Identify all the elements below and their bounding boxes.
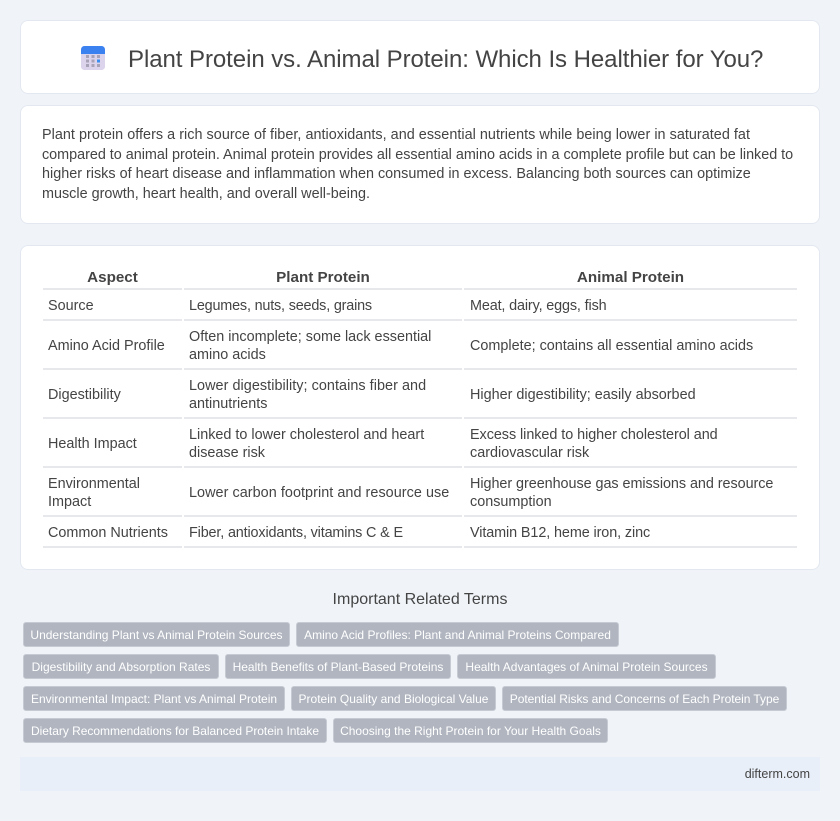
row: digestibility: Lower digestibility; contains fiber and xyxy=(189,378,426,394)
tags: related terms: Choosing the Right Protein for Your Health Goals xyxy=(340,724,601,738)
row: common nutrients xyxy=(48,525,650,541)
row: digestibility: antinutrients xyxy=(189,396,267,412)
row: amino acid profile: amino acids xyxy=(189,347,266,363)
tags: related terms: Potential Risks and Concerns of Each Protein Type xyxy=(510,692,779,706)
row: source: Legumes, nuts, seeds, grains xyxy=(189,298,372,314)
row: health impact: Health Impact xyxy=(48,436,137,452)
row: environmental impact: Environmental xyxy=(48,476,140,492)
row: source: Source xyxy=(48,298,94,314)
row: amino acid profile: Complete; contains all essential amino acids xyxy=(470,338,753,354)
row: common nutrients: Vitamin B12, heme iron, zinc xyxy=(470,525,650,541)
row: source xyxy=(48,298,606,314)
intro paragraph xyxy=(42,127,793,202)
icon: calendar xyxy=(81,46,105,70)
table header: Animal Protein xyxy=(577,269,684,286)
row: environmental impact: Higher greenhouse gas emissions and resource xyxy=(470,476,773,492)
row: health impact: cardiovascular risk xyxy=(470,445,589,461)
panel: comparison table xyxy=(20,245,820,570)
row: digestibility: Higher digestibility; easily absorbed xyxy=(470,387,696,403)
row: environmental impact: Impact xyxy=(48,494,91,510)
tags: related terms: Protein Quality and Biological Value xyxy=(299,692,488,706)
header card xyxy=(20,20,820,94)
row: amino acid profile: Amino Acid Profile xyxy=(48,338,165,354)
row: health impact: Excess linked to higher cholesterol and xyxy=(470,427,718,443)
panel: intro text xyxy=(20,105,820,224)
intro paragraph: muscle growth, heart health, and overall well-being. xyxy=(42,186,370,202)
table header xyxy=(87,269,684,286)
row: digestibility: Digestibility xyxy=(48,387,121,403)
row: health impact: disease risk xyxy=(189,445,265,461)
row: amino acid profile xyxy=(48,329,753,363)
tags: related terms: Health Advantages of Animal Protein Sources xyxy=(465,660,708,674)
tags: related terms: Amino Acid Profiles: Plant and Animal Proteins Compared xyxy=(304,628,611,642)
row: source: Meat, dairy, eggs, fish xyxy=(470,298,606,314)
source credit: difterm.com xyxy=(745,767,810,781)
intro paragraph: Plant protein offers a rich source of fiber, antioxidants, and essential nutrients while being lower in saturated fat xyxy=(42,127,750,143)
tags: related terms: Digestibility and Absorption Rates xyxy=(32,660,210,674)
row: digestibility xyxy=(48,378,696,412)
row: common nutrients: Fiber, antioxidants, vitamins C & E xyxy=(189,525,403,541)
row: amino acid profile: Often incomplete; some lack essential xyxy=(189,329,431,345)
intro paragraph: compared to animal protein. Animal protein provides all essential amino acids in a complete profile but can be linked to xyxy=(42,146,793,162)
row: environmental impact: consumption xyxy=(470,494,552,510)
row: common nutrients: Common Nutrients xyxy=(48,525,168,541)
row: health impact: Linked to lower cholesterol and heart xyxy=(189,427,424,443)
row: environmental impact xyxy=(48,476,773,510)
intro paragraph: higher risks of heart disease and inflammation when consumed in excess. Balancing both sources can optimize xyxy=(42,166,751,182)
row: environmental impact: Lower carbon footprint and resource use xyxy=(189,485,449,501)
tags: related terms: Health Benefits of Plant-Based Proteins xyxy=(233,660,443,674)
tags: related terms: Environmental Impact: Plant vs Animal Protein xyxy=(31,692,277,706)
heading: related terms: Important Related Terms xyxy=(333,591,507,608)
table header: Aspect xyxy=(87,269,138,286)
row: health impact xyxy=(48,427,718,461)
footer xyxy=(20,757,820,791)
table header: Plant Protein xyxy=(276,269,370,286)
tags: related terms: Dietary Recommendations for Balanced Protein Intake xyxy=(31,724,319,738)
tags: related terms: Understanding Plant vs Animal Protein Sources xyxy=(30,628,283,642)
tags: related terms xyxy=(23,622,787,743)
title: Plant Protein vs. Animal Protein: Which Is Healthier for You? xyxy=(128,46,763,73)
